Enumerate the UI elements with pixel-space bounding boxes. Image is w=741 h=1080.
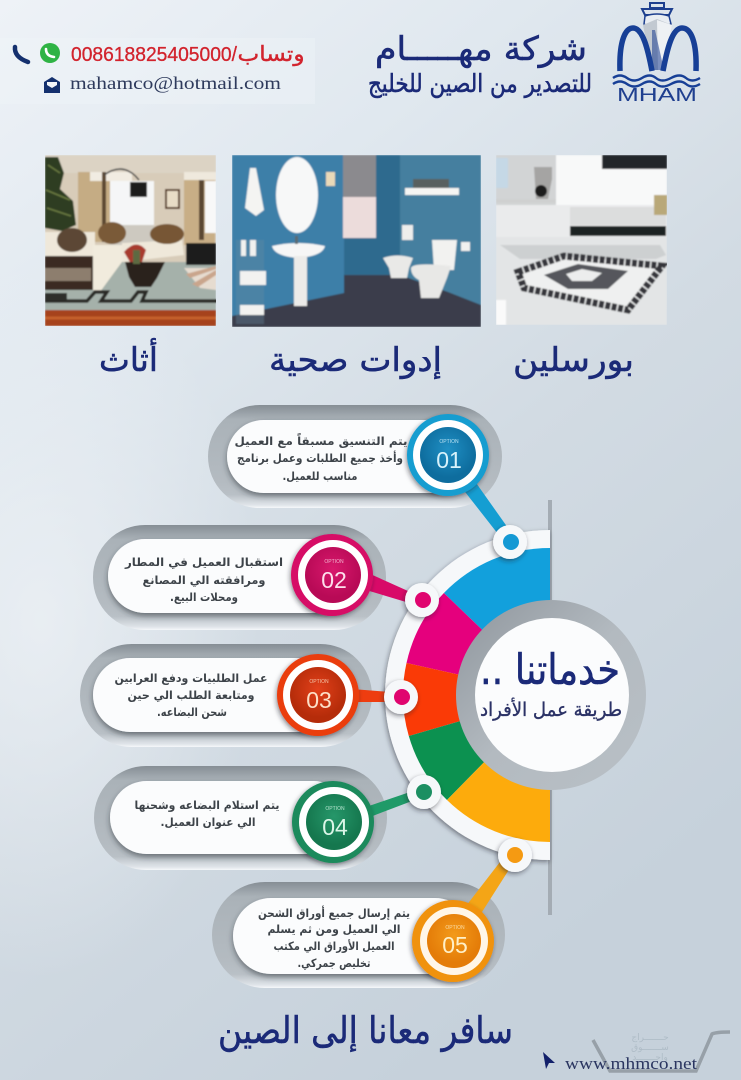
label: sanitary ware: إدوات صحية — [269, 340, 442, 380]
node — [493, 525, 527, 559]
badge: 02 — [321, 567, 347, 593]
panel: option 03 — [80, 644, 418, 747]
watermark: cart: ســـــــوق — [631, 1043, 669, 1053]
text: استقبال العميل في المطار — [124, 555, 283, 569]
badge: OPTION — [439, 439, 459, 445]
text: وأخذ جميع الطلبات وعمل برنامج — [237, 450, 403, 466]
title: company name: شركة مهـــــام — [375, 29, 587, 68]
connector — [462, 480, 508, 534]
text: يتم إرسال جميع أوراق الشحن — [258, 905, 410, 921]
white outer ring — [385, 530, 550, 860]
hub title: خدماتنا .. — [480, 645, 620, 694]
text — [258, 905, 410, 970]
email address: mahamco@hotmail.com — [70, 73, 281, 93]
whatsapp label: وتساب — [238, 42, 304, 66]
label: furniture: أثاث — [99, 338, 158, 379]
text — [234, 432, 408, 483]
node — [405, 583, 439, 617]
segment: orange — [447, 695, 550, 842]
segment: magenta — [406, 593, 550, 695]
text: يتم التنسيق مسبقاً مع العميل — [234, 432, 408, 448]
logo: MHAM ship and arches: MHAM — [617, 85, 697, 105]
subtitle: للتصدير من الصين للخليج — [368, 69, 592, 99]
segment: blue — [444, 548, 550, 695]
text: الي العميل ومن ثم يسلم — [268, 922, 400, 937]
badge: OPTION — [324, 559, 344, 565]
text — [134, 798, 280, 830]
panel: option 05 — [212, 838, 532, 988]
contact: email — [44, 73, 281, 93]
vertical axis line — [548, 500, 552, 915]
badge — [412, 900, 494, 982]
phone number: 008618825405000/ — [71, 44, 237, 66]
badge: 04 — [322, 814, 348, 840]
connector — [366, 573, 408, 602]
text: عمل الطلبيات ودفع العرابين — [114, 671, 268, 686]
segment: red — [403, 663, 550, 736]
node — [498, 838, 532, 872]
logo: MHAM ship and arches — [613, 3, 700, 105]
badge — [291, 534, 373, 616]
text: شحن البضاعه. — [157, 705, 227, 719]
badge: OPTION — [445, 925, 465, 931]
panel: option 01 — [208, 405, 527, 559]
watermark: cart: واحـــــــد — [632, 1053, 668, 1063]
watermark: cart: حـــــــراج — [631, 1033, 669, 1043]
badge: 05 — [442, 932, 468, 958]
text: ومحلات البيع. — [170, 590, 238, 605]
contact: phone and whatsapp — [15, 42, 305, 66]
text: ومرافقته الي المصانع — [142, 573, 266, 588]
badge: OPTION — [309, 679, 329, 685]
segment: green — [409, 695, 550, 800]
badge: 01 — [436, 447, 462, 473]
badge — [292, 781, 374, 863]
icon: phone — [15, 47, 28, 62]
hub subtitle: طريقة عمل الأفراد — [480, 698, 622, 721]
icon: whatsapp — [40, 43, 60, 63]
chart: services half ring — [385, 530, 550, 860]
callout: center hub — [456, 600, 646, 790]
watermark: cart — [593, 1032, 730, 1071]
text: الي عنوان العميل. — [160, 815, 256, 830]
panel: option 04 — [94, 766, 441, 870]
text: مناسب للعميل. — [282, 469, 358, 483]
connector — [352, 689, 390, 702]
panel: option 02 — [93, 525, 439, 630]
website link: www.mhmco.net — [565, 1054, 697, 1073]
label: porcelain: بورسلين — [513, 340, 634, 379]
badge — [407, 414, 489, 496]
text — [114, 671, 268, 719]
icon: cursor arrow — [543, 1052, 555, 1069]
text — [124, 555, 283, 605]
node — [407, 775, 441, 809]
text: تخليص جمركي. — [298, 956, 370, 970]
badge: OPTION — [325, 806, 345, 812]
text: يتم استلام البضاعه وشحنها — [134, 798, 280, 813]
badge: 03 — [306, 687, 332, 713]
photo: furniture — [45, 155, 234, 326]
text: ومتابعة الطلب الي حين — [128, 688, 254, 703]
text: العميل الأوراق الي مكتب — [274, 939, 394, 954]
slogan: سافر معانا إلى الصين — [218, 1009, 513, 1052]
photo: porcelain — [496, 155, 667, 325]
node — [384, 680, 418, 714]
icon: envelope — [44, 77, 60, 93]
photo: bathroom — [232, 155, 481, 327]
connector — [466, 862, 510, 912]
badge — [277, 654, 359, 736]
connector — [366, 792, 412, 817]
